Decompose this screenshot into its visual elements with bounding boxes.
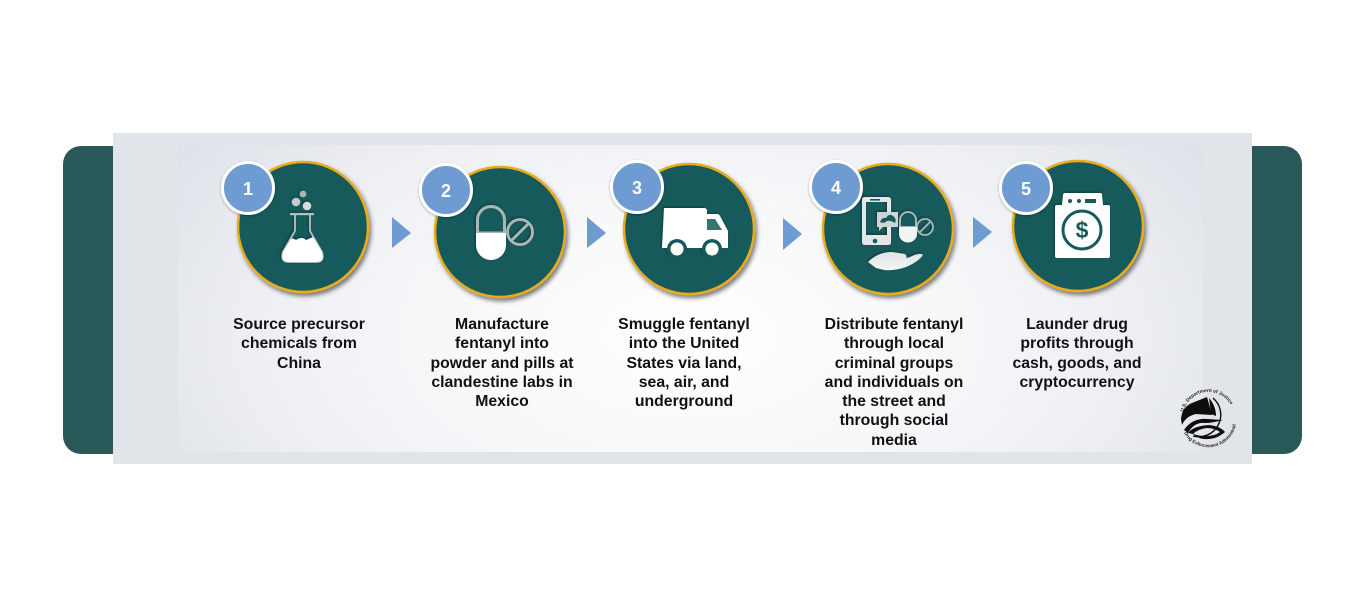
text: step 4 caption: through social [840, 412, 948, 429]
step 3 badge: 3 [632, 178, 642, 198]
text: step 3 caption: Smuggle fentanyl [618, 316, 750, 333]
step 5 badge: 5 [1021, 179, 1031, 199]
icon: money washing machine: $ [1076, 217, 1089, 243]
arrow 1 [392, 217, 411, 248]
step 3 badge [612, 162, 662, 212]
icon: money washing machine [1055, 193, 1110, 258]
step 5 circle [1013, 161, 1143, 291]
icon: DEA seal: U.S. Department of Justice [1180, 388, 1232, 412]
text: step 2 caption: powder and pills at [430, 354, 574, 372]
text: step 4 caption: the street and [842, 393, 946, 410]
icon: pills [476, 207, 532, 260]
step 4 circle [823, 164, 953, 294]
text: step 2 caption: fentanyl into [455, 335, 549, 352]
text: step 2 caption [430, 316, 574, 410]
text: step 5 caption: cryptocurrency [1019, 374, 1134, 391]
step 4 badge: 4 [831, 178, 841, 198]
arrow 3 [783, 218, 802, 250]
text: step 1 caption: Source precursor [233, 316, 365, 333]
panel: light grey card [113, 133, 1252, 464]
text: step 4 caption: criminal groups [835, 354, 953, 372]
text: step 3 caption: into the United [629, 335, 739, 352]
step 4 badge [810, 162, 862, 212]
step 3 circle [624, 164, 754, 294]
icon: truck [662, 208, 728, 259]
text: step 4 caption [825, 316, 963, 448]
arrow 2 [587, 217, 606, 248]
text: step 2 caption: Manufacture [455, 316, 549, 333]
step 2 badge: 2 [441, 181, 451, 201]
text: step 4 caption: media [871, 432, 917, 448]
step 2 circle [435, 167, 565, 297]
text: step 1 caption [233, 316, 365, 372]
panel: inner gradient area [178, 145, 1203, 452]
step 1 badge: 1 [243, 179, 253, 199]
icon: DEA seal [1180, 388, 1236, 448]
panel: dark green backing [63, 146, 1302, 454]
text: step 5 caption: Launder drug [1026, 316, 1128, 333]
text: step 3 caption: underground [635, 393, 733, 410]
icon: phone, pills and hand [862, 197, 933, 270]
text: step 5 caption [1012, 316, 1142, 391]
text: step 4 caption: Distribute fentanyl [825, 316, 963, 333]
arrow 4 [973, 217, 992, 248]
step 1 circle [238, 162, 368, 292]
text: step 5 caption: profits through [1020, 335, 1134, 352]
step 2 badge [420, 164, 472, 216]
text: step 2 caption: Mexico [475, 393, 529, 410]
step 1 badge [222, 162, 274, 214]
step 5 badge [1000, 162, 1052, 214]
text: step 1 caption: China [277, 354, 321, 372]
text: step 5 caption: cash, goods, and [1012, 354, 1142, 372]
text: step 3 caption: sea, air, and [639, 374, 729, 391]
text: step 4 caption: through local [844, 335, 944, 352]
icon: DEA seal: Drug Enforcement Administration [1184, 424, 1236, 448]
text: step 2 caption: clandestine labs in [431, 374, 573, 391]
text: step 4 caption: and individuals on [825, 374, 963, 391]
icon: flask [282, 191, 323, 262]
text: step 3 caption: States via land, [626, 354, 742, 372]
text: step 1 caption: chemicals from [241, 335, 357, 352]
text: step 3 caption [618, 316, 750, 410]
